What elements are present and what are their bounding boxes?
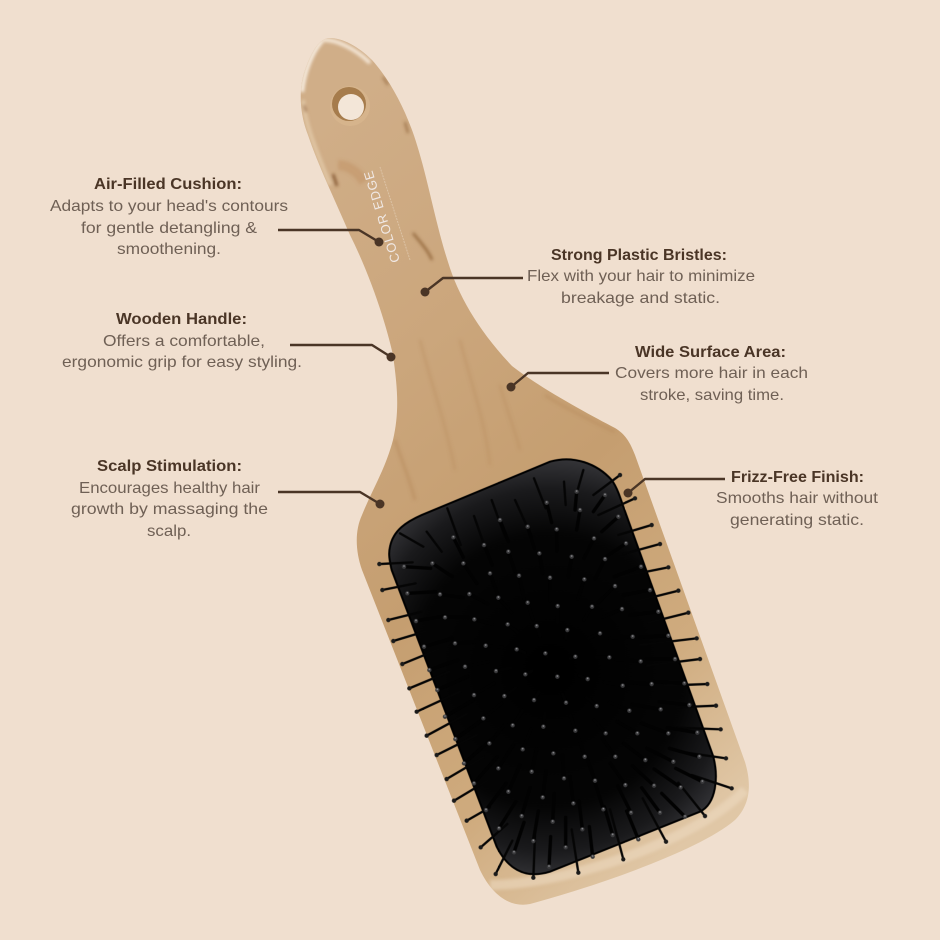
description: growth by massaging the xyxy=(71,501,268,518)
black cushion pad xyxy=(389,459,716,874)
description: scalp. xyxy=(147,523,191,540)
brand logo: COLOR EDGE xyxy=(360,168,403,265)
description: smoothening. xyxy=(117,241,221,258)
heading: Wide Surface Area: xyxy=(635,344,786,361)
description: Adapts to your head's contours xyxy=(50,198,288,215)
callout: Air-Filled Cushion xyxy=(50,176,384,258)
heading: Frizz-Free Finish: xyxy=(731,469,864,486)
illustration: wooden paddle brush xyxy=(301,38,749,905)
description: Encourages healthy hair xyxy=(79,480,261,497)
heading: Scalp Stimulation: xyxy=(97,458,242,475)
description xyxy=(71,480,268,540)
description: generating static. xyxy=(730,512,864,529)
handle hole xyxy=(330,86,370,126)
description: stroke, saving time. xyxy=(640,387,784,404)
leader line xyxy=(420,278,523,296)
bristle tips xyxy=(379,475,732,878)
leader line xyxy=(278,492,384,508)
description: Smooths hair without xyxy=(716,490,879,507)
brush body: wood xyxy=(301,38,749,905)
description xyxy=(716,490,879,529)
description xyxy=(50,198,288,258)
callout: Scalp Stimulation xyxy=(71,458,384,540)
callout: Wide Surface Area xyxy=(506,344,808,404)
description xyxy=(62,333,302,371)
description xyxy=(615,365,808,404)
inner bristles xyxy=(404,492,702,867)
wood grain and edge highlights xyxy=(302,40,745,885)
description: breakage and static. xyxy=(561,290,720,307)
description xyxy=(527,268,755,307)
leader line xyxy=(624,479,725,498)
description: for gentle detangling & xyxy=(81,220,257,237)
description: Covers more hair in each xyxy=(615,365,808,382)
leader line xyxy=(278,230,384,246)
leader line xyxy=(290,345,396,362)
edge bristles xyxy=(379,470,732,878)
inner bristle balls xyxy=(404,491,702,867)
heading: Wooden Handle: xyxy=(116,311,247,328)
callout: Wooden Handle xyxy=(62,311,396,371)
description: ergonomic grip for easy styling. xyxy=(62,354,302,371)
description: Offers a comfortable, xyxy=(103,333,265,350)
callout: Strong Plastic Bristles xyxy=(420,247,755,307)
heading: Air-Filled Cushion: xyxy=(94,176,242,193)
cushion pad and bristles xyxy=(379,459,732,878)
callout: Frizz-Free Finish xyxy=(624,469,879,529)
description: Flex with your hair to minimize xyxy=(527,268,755,285)
heading: Strong Plastic Bristles: xyxy=(551,247,727,264)
leader line xyxy=(506,373,609,392)
